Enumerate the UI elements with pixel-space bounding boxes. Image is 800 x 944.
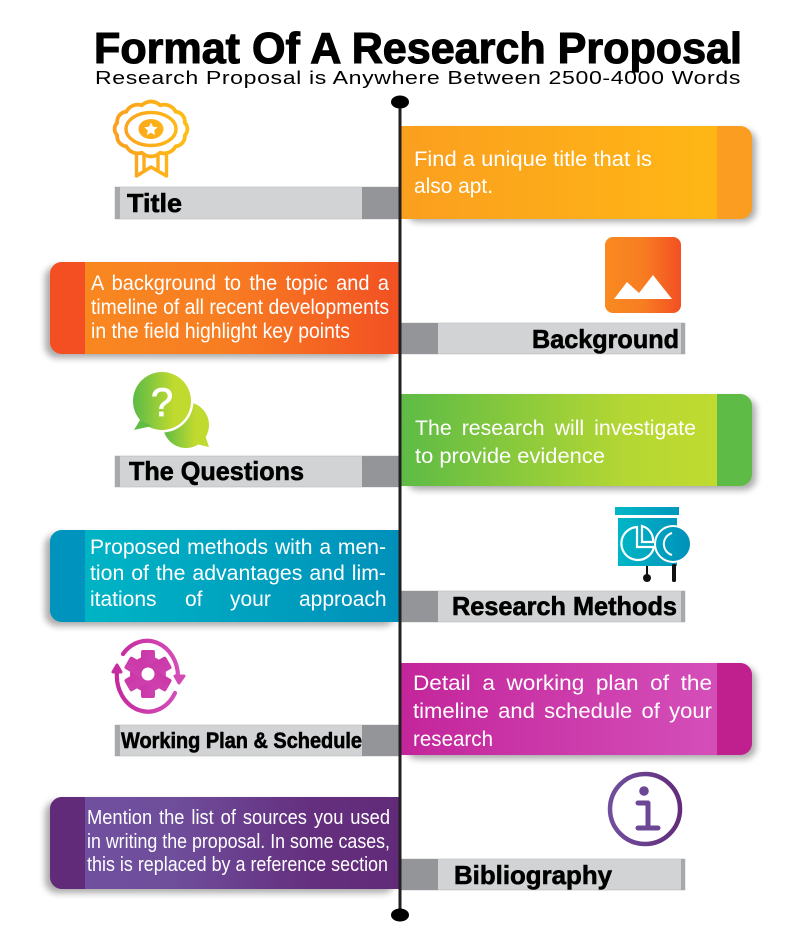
panel: bibliography description card: this is replaced by a reference section: [87, 854, 388, 876]
panel: research methods description card: your: [230, 588, 271, 611]
panel: bibliography description card: Mention the list of sources you used: [87, 807, 390, 829]
icon: speech bubbles with question mark: ?: [151, 381, 173, 425]
icon: award rosette: [115, 102, 187, 176]
panel: working plan description card: timeline and schedule of your: [413, 700, 712, 723]
label bar: Background: [400, 323, 685, 354]
panel: research methods description card: Proposed methods with a men-: [90, 536, 386, 559]
panel: research methods description card: [45, 530, 400, 626]
icon: gear with cycle arrows: [113, 641, 184, 712]
label bar: The Questions: The Questions: [129, 456, 304, 486]
label bar: Working Plan & Schedule: Working Plan & Schedule: [121, 728, 362, 753]
panel: working plan description card: [400, 663, 756, 759]
panel: background description card: A background to the topic and a: [91, 272, 389, 295]
panel: bibliography description card: [45, 797, 400, 893]
panel: questions description card: to provide evidence: [415, 445, 605, 468]
panel: title description card: Find a unique title that is: [414, 148, 652, 171]
panel: background description card: [45, 262, 400, 358]
panel: background description card: in the field highlight key points: [91, 320, 350, 343]
timeline axis: [391, 96, 409, 922]
icon: image with mountains: [605, 237, 681, 313]
icon: presentation board with charts: [615, 507, 691, 582]
label bar: Research Methods: Research Methods: [452, 591, 677, 621]
icon: speech bubbles with question mark: [130, 370, 209, 448]
panel: questions description card: The research will investigate: [415, 417, 696, 440]
panel: research methods description card: itations: [90, 588, 157, 611]
panel: working plan description card: Detail a working plan of the: [413, 672, 712, 695]
panel: title description card: [400, 126, 756, 222]
label bar: The Questions: [115, 456, 400, 487]
label bar: Bibliography: Bibliography: [454, 860, 613, 890]
label bar: Bibliography: [400, 859, 685, 890]
panel: working plan description card: research: [413, 728, 493, 751]
panel: background description card: timeline of all recent developments: [91, 296, 389, 319]
panel: research methods description card: approach: [299, 588, 387, 611]
panel: bibliography description card: in writing the proposal. In some cases,: [87, 831, 390, 853]
label bar: Background: Background: [532, 324, 679, 354]
title: Format Of A Research Proposal: [94, 24, 742, 73]
subtitle: Research Proposal is Anywhere Between 2500-4000 Words: [95, 67, 741, 88]
label bar: Title: [115, 187, 400, 219]
panel: research methods description card: of: [185, 588, 203, 611]
icon: information circle: [610, 774, 680, 844]
panel: research methods description card: tion of the advantages and lim-: [90, 562, 386, 585]
panel: questions description card: [400, 394, 756, 490]
label bar: Title: Title: [127, 188, 182, 218]
panel: title description card: also apt.: [414, 175, 493, 198]
